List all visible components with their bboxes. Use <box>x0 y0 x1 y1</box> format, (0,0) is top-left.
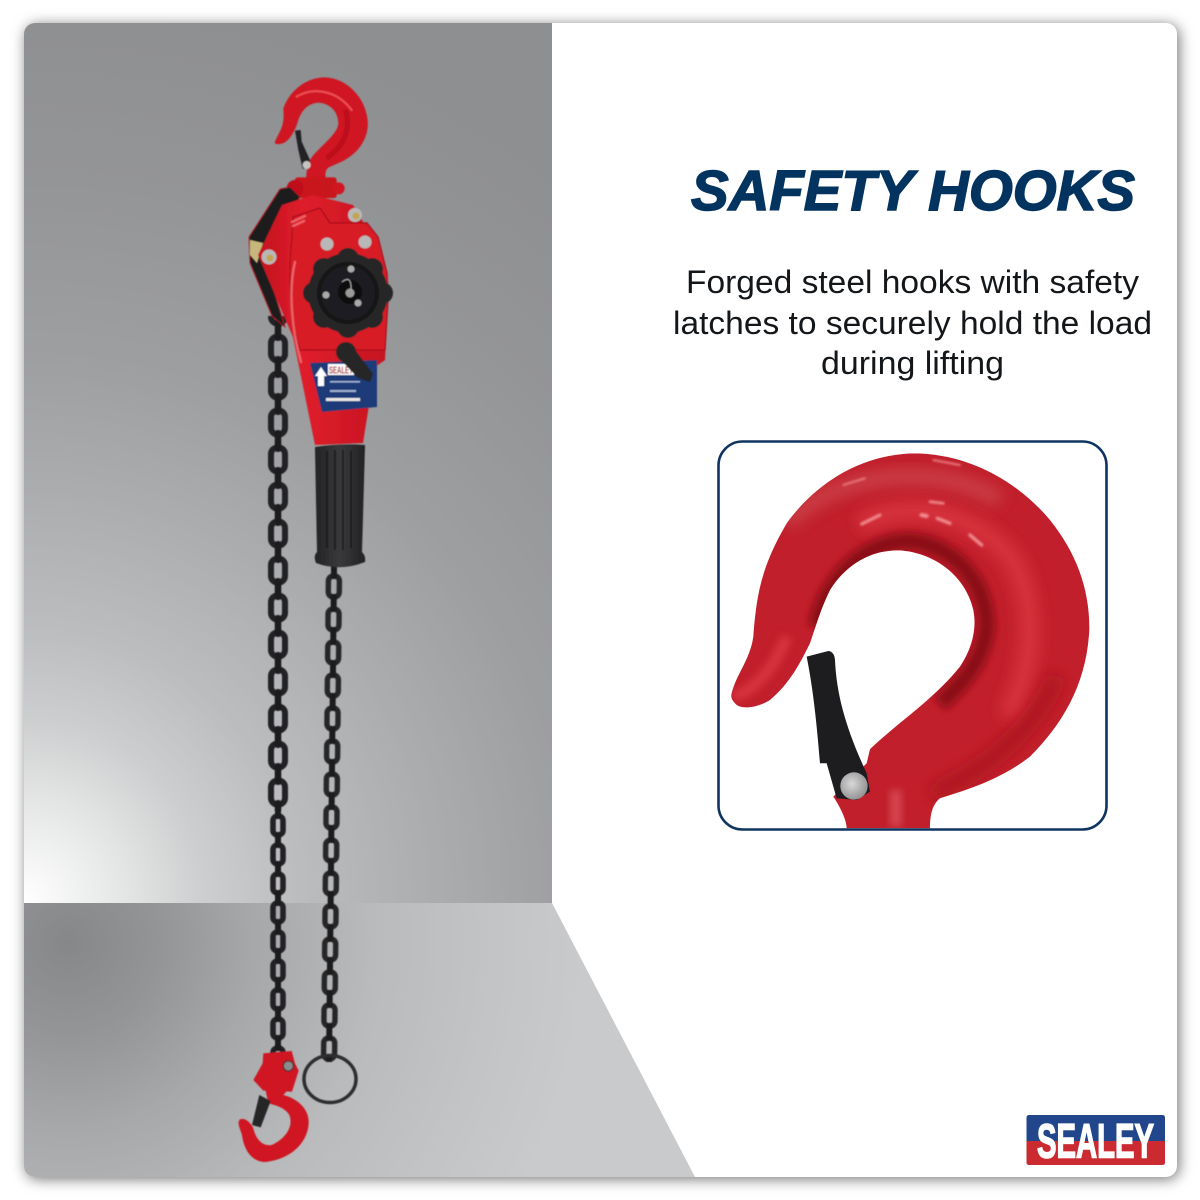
description text: Forged steel hooks with safety <box>686 264 1139 300</box>
pull ring <box>304 1056 356 1102</box>
right hand chain <box>319 566 344 1062</box>
illustration: lever hoist <box>239 77 393 1162</box>
safety latch <box>807 651 870 800</box>
hoist red body <box>258 195 388 445</box>
heading: SAFETY HOOKS <box>691 159 1135 222</box>
bottom hook assembly <box>239 1051 309 1162</box>
top hook latch <box>295 130 310 169</box>
hoist backplate <box>249 187 300 327</box>
swivel block <box>287 177 345 198</box>
product data plate <box>310 360 377 412</box>
left load chain <box>266 316 290 1057</box>
description text: during lifting <box>821 345 1004 381</box>
description text: latches to securely hold the load <box>673 305 1152 341</box>
bottom hook latch <box>252 1095 271 1127</box>
hook highlights <box>843 460 982 545</box>
top hook <box>275 77 368 198</box>
black hand wheel <box>303 248 393 338</box>
panel: studio backdrop <box>24 23 695 1177</box>
wall backdrop <box>24 23 552 903</box>
rubber grip handle <box>315 444 365 567</box>
body bolts <box>262 208 372 264</box>
close-up hook <box>727 447 1093 830</box>
panel: hook close-up <box>718 442 1106 830</box>
bottom hook <box>239 1087 309 1162</box>
latch pivot pin <box>840 772 868 800</box>
raised gear housing <box>290 208 388 350</box>
body highlights <box>291 216 305 362</box>
description text <box>673 264 1152 381</box>
floor <box>24 903 695 1177</box>
product data plate: SEALEY <box>329 366 353 376</box>
bottom swivel <box>253 1051 299 1092</box>
pawl lever <box>336 342 373 382</box>
